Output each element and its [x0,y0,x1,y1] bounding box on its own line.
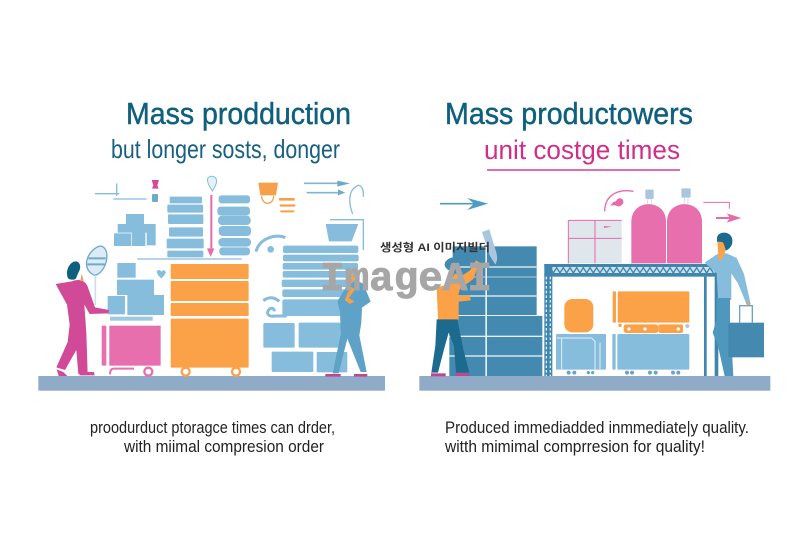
body text: right: Produced immediadded inmmediate|y quality. [445,419,749,437]
watermark: Korean label: 생성형 AI 이미지빌더 [380,240,490,254]
man figure with bag [705,233,764,376]
stack: centre-left plates [167,197,204,257]
swirl details [256,236,287,316]
woman figure in pink [56,246,109,376]
orange cabinet on wheels [171,264,249,376]
stack: centre-right rolled plates [217,195,251,255]
pink swoosh icon [605,191,633,211]
illustration: right factory scene [419,188,770,391]
mask balloon [86,246,107,275]
floor: left [38,376,385,391]
pink cart [102,326,161,376]
top line icons: arrows and lamps [95,176,363,257]
shopping bag [728,306,764,357]
crate on platform [568,220,622,263]
blue shelving stack [449,246,542,376]
illustration: left warehouse scene [38,176,385,391]
body text: left: with miimal compresion order [123,438,324,456]
title: right heading: Mass productowers [445,96,693,131]
body text: left [90,419,335,456]
worker figure in blue [325,273,371,377]
subtitle: right: unit costge times [484,135,680,165]
subtitle underline [487,169,680,171]
conveyor line [137,257,242,261]
steel frame platform [544,264,718,376]
title: left heading: Mass prodduction [126,96,351,131]
pink tanks [631,188,702,263]
worker figure in orange [431,229,497,376]
floor: right [419,376,770,391]
body text: right [444,419,749,456]
pink arrows: right [703,202,741,223]
subtitle: left: but longer sosts, donger [111,134,340,164]
right stack of layers [263,246,359,372]
machines inside frame [556,291,689,375]
arrow: top left [440,198,488,210]
body text: right: witth mimimal comprresion for quality! [444,438,705,456]
boxes: upper left stack [108,214,166,321]
body text: left: proodurduct ptoragce times can drder, [90,419,335,437]
watermark: ImageAI: ImageAI [320,257,492,303]
